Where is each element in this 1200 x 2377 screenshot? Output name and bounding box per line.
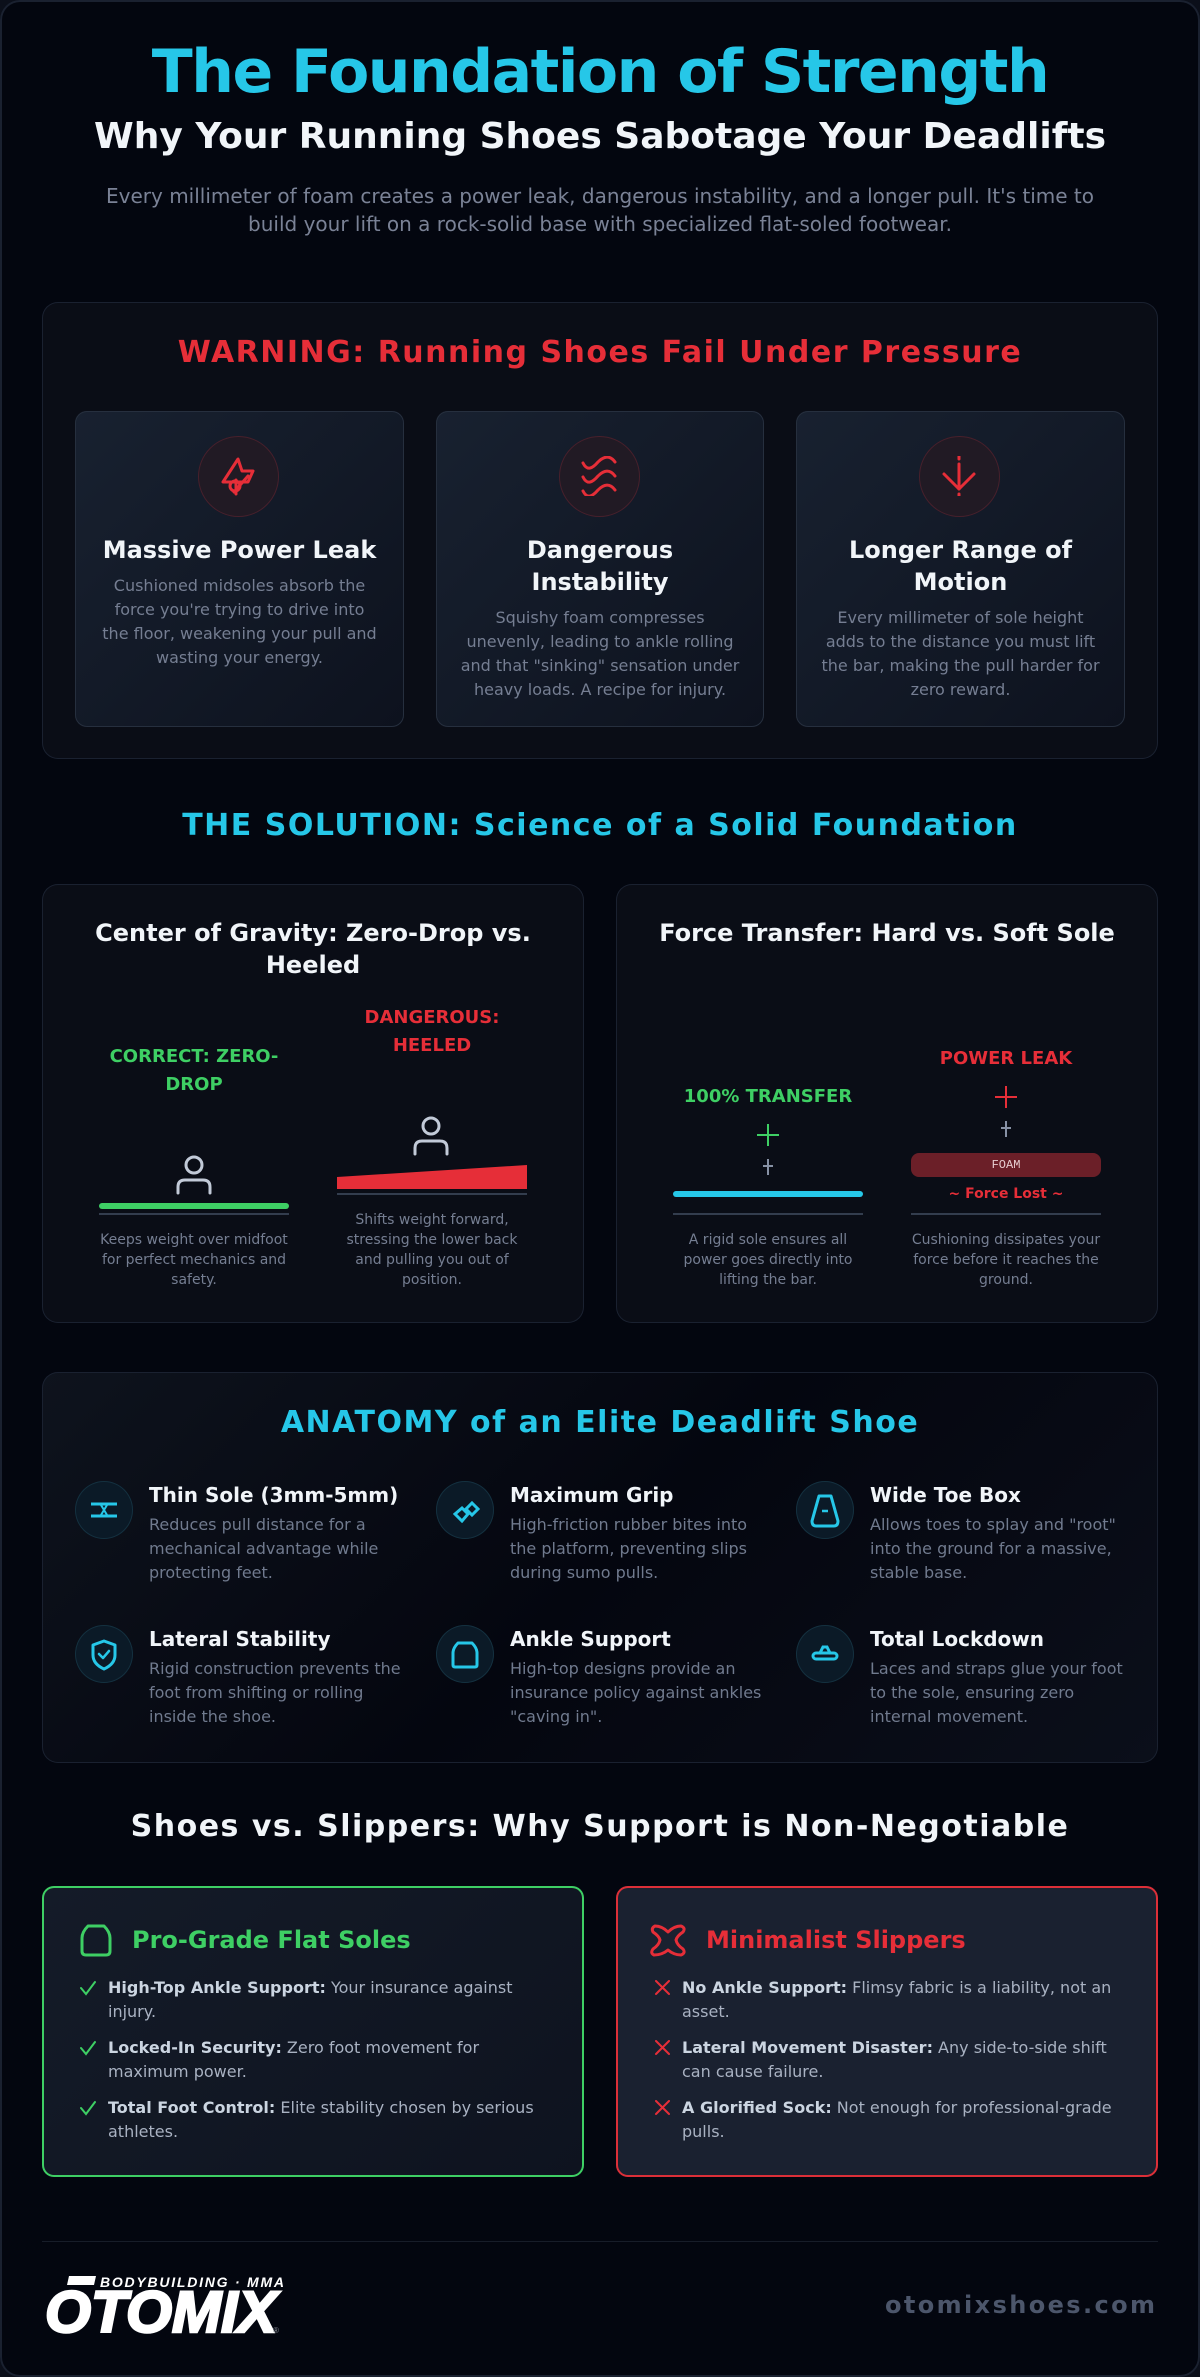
feature: thin sole xyxy=(75,1481,398,1582)
panel: anatomy xyxy=(42,1372,1158,1763)
icon: waves xyxy=(559,436,640,517)
drawback list xyxy=(654,1976,1124,2144)
feature text xyxy=(870,1515,1116,1582)
benefit text xyxy=(108,2096,534,2144)
feature: wide toe box xyxy=(796,1481,1116,1582)
panel heading: Pro-Grade Flat Soles xyxy=(132,1926,411,1954)
card heading: Dangerous xyxy=(527,536,673,564)
feature text: the platform, preventing slips xyxy=(510,1539,747,1558)
feature text: internal movement. xyxy=(870,1707,1028,1726)
card text: the bar, making the pull harder for xyxy=(821,656,1100,675)
caption: stressing the lower back xyxy=(347,1232,517,1248)
benefit text: Total Foot Control: Elite stability chosen by serious xyxy=(108,2098,534,2117)
feature text xyxy=(510,1515,747,1582)
caption: position. xyxy=(402,1272,462,1288)
icon: check xyxy=(80,2039,97,2056)
warning heading: WARNING: Running Shoes Fail Under Pressure xyxy=(178,335,1022,370)
footer divider xyxy=(42,2241,1158,2242)
caption: A rigid sole ensures all xyxy=(689,1232,847,1248)
feature text: "caving in". xyxy=(510,1707,602,1726)
solution heading: THE SOLUTION: Science of a Solid Foundation xyxy=(182,808,1018,843)
feature text xyxy=(510,1659,761,1726)
feature title: Lateral Stability xyxy=(149,1627,330,1651)
feature title: Wide Toe Box xyxy=(870,1483,1021,1507)
panel: minimalist slippers xyxy=(616,1886,1158,2177)
card heading xyxy=(849,536,1072,596)
caption: force before it reaches the xyxy=(913,1252,1099,1268)
feature text: High-top designs provide an xyxy=(510,1659,735,1678)
feature text xyxy=(870,1659,1123,1726)
force lost text: ~ Force Lost ~ xyxy=(949,1186,1063,1202)
icon: cross xyxy=(655,2100,670,2115)
feature: maximum grip xyxy=(436,1481,747,1582)
feature text: Rigid construction prevents the xyxy=(149,1659,401,1678)
feature text xyxy=(149,1515,378,1582)
heeled wedge xyxy=(337,1165,527,1189)
feature text: to the sole, ensuring zero xyxy=(870,1683,1074,1702)
label: correct: DROP xyxy=(165,1074,223,1095)
ground line xyxy=(337,1193,527,1195)
icon: high-top shoe xyxy=(80,1924,112,1956)
ground line xyxy=(99,1213,289,1215)
drawback text xyxy=(682,1976,1111,2024)
title: The Foundation of Strength xyxy=(152,37,1048,107)
caption: lifting the bar. xyxy=(719,1272,817,1288)
drawback text: A Glorified Sock: Not enough for professional-grade xyxy=(682,2098,1112,2117)
card text: and that "sinking" sensation under xyxy=(461,656,739,675)
feature text: Laces and straps glue your foot xyxy=(870,1659,1123,1678)
diagram: hard sole xyxy=(673,1086,863,1288)
benefit text: maximum power. xyxy=(108,2062,247,2081)
panel: pro-grade flat soles xyxy=(42,1886,584,2177)
card text: unevenly, leading to ankle rolling xyxy=(466,632,734,651)
panel heading: Minimalist Slippers xyxy=(706,1926,966,1954)
card heading xyxy=(527,536,673,596)
foam block: FOAM xyxy=(992,1158,1020,1172)
feature title: Maximum Grip xyxy=(510,1483,674,1507)
card: massive power leak xyxy=(75,411,404,727)
diagram: heeled xyxy=(337,1007,527,1288)
caption xyxy=(912,1232,1100,1288)
caption: and pulling you out of xyxy=(355,1252,509,1268)
icon: down arrow xyxy=(919,436,1000,517)
feature: lateral stability xyxy=(75,1625,401,1726)
website url: otomixshoes.com xyxy=(885,2291,1157,2319)
card: dangerous instability xyxy=(436,411,764,727)
icon: grip xyxy=(436,1481,494,1539)
icon: ankle xyxy=(436,1625,494,1683)
benefit text: injury. xyxy=(108,2002,156,2021)
icon: lockdown xyxy=(796,1625,854,1683)
icon: check xyxy=(80,2099,97,2116)
caption: safety. xyxy=(171,1272,217,1288)
icon: grey force plus xyxy=(1001,1121,1011,1137)
icon: person xyxy=(414,1116,448,1156)
panel: center of gravity xyxy=(42,884,584,1323)
benefit text xyxy=(108,1978,512,2021)
caption: Shifts weight forward, xyxy=(355,1212,509,1228)
card text: heavy loads. A recipe for injury. xyxy=(474,680,726,699)
drawback text: can cause failure. xyxy=(682,2062,823,2081)
benefit text: High-Top Ankle Support: Your insurance against xyxy=(108,1978,512,1997)
intro text: build your lift on a rock-solid base with specialized flat-soled footwear. xyxy=(248,212,952,236)
card text xyxy=(821,608,1100,699)
ground line xyxy=(911,1213,1101,1215)
caption: Cushioning dissipates your xyxy=(912,1232,1100,1248)
card text: Every millimeter of sole height xyxy=(837,608,1084,627)
anatomy heading: ANATOMY of an Elite Deadlift Shoe xyxy=(281,1405,919,1440)
caption: ground. xyxy=(979,1272,1033,1288)
drawback text xyxy=(682,2036,1107,2084)
ground line xyxy=(673,1213,863,1215)
benefit text: athletes. xyxy=(108,2122,178,2141)
icon: cross xyxy=(655,2040,670,2055)
label: transfer: 100% TRANSFER xyxy=(684,1086,852,1107)
icon: lightning bolt xyxy=(198,436,279,517)
feature title: Ankle Support xyxy=(510,1627,671,1651)
feature text: stable base. xyxy=(870,1563,967,1582)
feature: ankle support xyxy=(436,1625,761,1726)
intro text xyxy=(106,184,1094,236)
card heading: Instability xyxy=(532,568,668,596)
label: dangerous: DANGEROUS: xyxy=(365,1007,499,1028)
benefit text: Locked-In Security: Zero foot movement for xyxy=(108,2038,479,2057)
icon: slipper xyxy=(650,1924,686,1957)
card heading: Massive Power Leak xyxy=(103,536,376,564)
logo: otomix: BODYBUILDING · MMA xyxy=(100,2274,284,2290)
icon: check xyxy=(80,1981,96,1996)
card text: force you're trying to drive into xyxy=(115,600,364,619)
caption xyxy=(347,1212,518,1288)
diagram: soft sole xyxy=(911,1048,1101,1288)
icon: thin sole xyxy=(75,1481,133,1539)
label: power leak: POWER LEAK xyxy=(940,1048,1072,1069)
panel: warning xyxy=(42,302,1158,759)
flat sole bar xyxy=(99,1203,289,1209)
caption xyxy=(684,1232,852,1288)
card text: zero reward. xyxy=(911,680,1010,699)
card text: Cushioned midsoles absorb the xyxy=(114,576,365,595)
feature text: inside the shoe. xyxy=(149,1707,276,1726)
feature title: Total Lockdown xyxy=(870,1627,1044,1651)
caption xyxy=(100,1232,288,1288)
drawback text: Lateral Movement Disaster: Any side-to-side shift xyxy=(682,2038,1107,2057)
card heading: Longer Range of xyxy=(849,536,1072,564)
card text: adds to the distance you must lift xyxy=(826,632,1095,651)
feature text: into the ground for a massive, xyxy=(870,1539,1112,1558)
drawback text: pulls. xyxy=(682,2122,725,2141)
label: dangerous: HEELED xyxy=(393,1035,471,1056)
icon: green force plus xyxy=(757,1124,779,1146)
intro text: Every millimeter of foam creates a power leak, dangerous instability, and a longer pull. It's time to xyxy=(106,184,1094,208)
label: correct: CORRECT: ZERO- xyxy=(110,1046,278,1067)
drawback text xyxy=(682,2096,1112,2144)
icon: grey force plus xyxy=(763,1159,773,1175)
comparison heading: Shoes vs. Slippers: Why Support is Non-Negotiable xyxy=(131,1809,1069,1844)
panel heading: Force Transfer: Hard vs. Soft Sole xyxy=(659,919,1115,947)
panel: force transfer xyxy=(616,884,1158,1323)
card heading: Motion xyxy=(914,568,1007,596)
drawback text: asset. xyxy=(682,2002,730,2021)
card text: wasting your energy. xyxy=(156,648,323,667)
feature text: High-friction rubber bites into xyxy=(510,1515,747,1534)
panel heading xyxy=(95,919,531,979)
feature text: Allows toes to splay and "root" xyxy=(870,1515,1116,1534)
diagram: zero-drop xyxy=(99,1046,289,1288)
feature text: Reduces pull distance for a xyxy=(149,1515,366,1534)
benefit text xyxy=(108,2036,479,2084)
feature text xyxy=(149,1659,401,1726)
drawback text: No Ankle Support: Flimsy fabric is a liability, not an xyxy=(682,1978,1111,1997)
feature text: protecting feet. xyxy=(149,1563,273,1582)
icon: red force plus xyxy=(995,1086,1017,1108)
panel heading: Center of Gravity: Zero-Drop vs. xyxy=(95,919,531,947)
label: correct xyxy=(110,1046,278,1095)
icon: shield xyxy=(75,1625,133,1683)
feature: total lockdown xyxy=(796,1625,1123,1726)
card text xyxy=(102,576,377,667)
foam block xyxy=(911,1153,1101,1177)
feature text: during sumo pulls. xyxy=(510,1563,658,1582)
logo: otomix: ® xyxy=(273,2326,279,2335)
card text xyxy=(461,608,740,699)
caption: power goes directly into xyxy=(684,1252,852,1268)
panel heading: Heeled xyxy=(266,951,360,979)
feature text: insurance policy against ankles xyxy=(510,1683,761,1702)
card: longer range of motion xyxy=(796,411,1125,727)
card text: the floor, weakening your pull and xyxy=(102,624,377,643)
caption: for perfect mechanics and xyxy=(102,1252,286,1268)
label: dangerous xyxy=(365,1007,499,1056)
card text: Squishy foam compresses xyxy=(495,608,705,627)
rigid sole bar xyxy=(673,1191,863,1197)
subtitle: Why Your Running Shoes Sabotage Your Deadlifts xyxy=(94,116,1106,157)
feature text: mechanical advantage while xyxy=(149,1539,378,1558)
icon: cross xyxy=(655,1980,670,1995)
icon: person xyxy=(176,1156,212,1194)
benefit list xyxy=(80,1978,534,2141)
caption: Keeps weight over midfoot xyxy=(100,1232,288,1248)
icon: toe box xyxy=(796,1481,854,1539)
feature title: Thin Sole (3mm-5mm) xyxy=(149,1483,398,1507)
feature text: foot from shifting or rolling xyxy=(149,1683,363,1702)
